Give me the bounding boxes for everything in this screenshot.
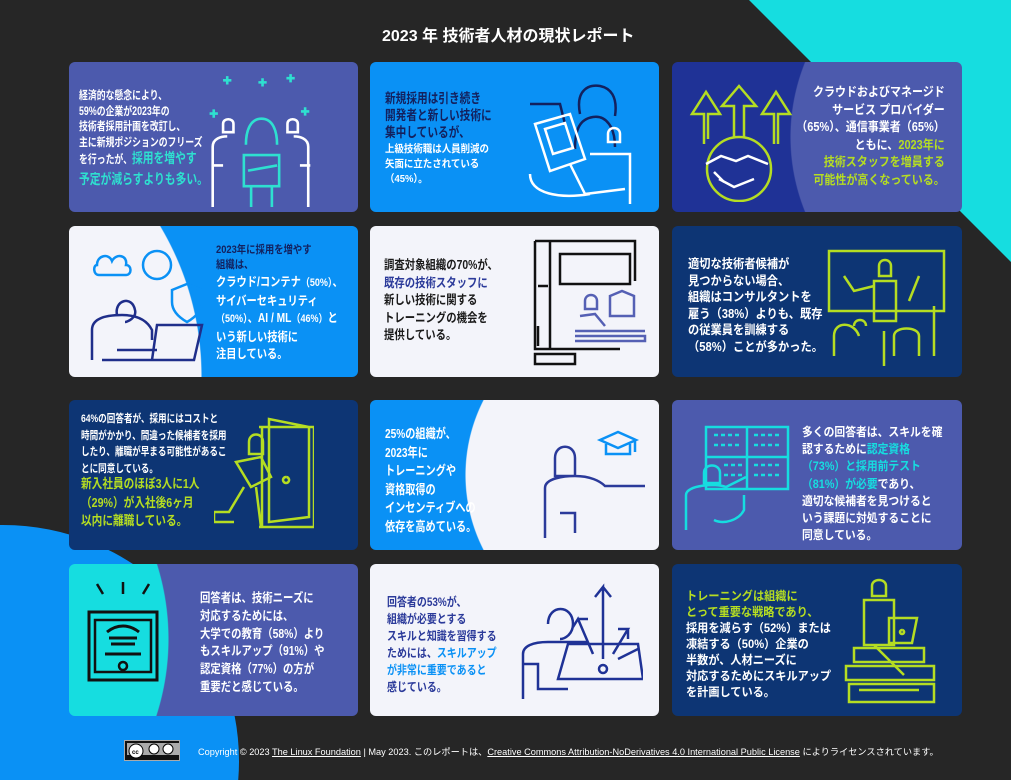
panel 7: cost of hiring and attrition xyxy=(69,400,358,550)
text: 雇う（38%）よりも、既存 xyxy=(688,306,822,320)
text: 凍結する（50%）企業の xyxy=(686,637,809,651)
icon: developers with laptop xyxy=(528,84,632,204)
text: 重要だと感じている。 xyxy=(200,680,304,694)
panel 5: training opportunities xyxy=(370,226,659,377)
panel 10: upskilling vs degree xyxy=(69,564,358,716)
text xyxy=(686,589,831,699)
panel 2: new hiring developers: 矢面に立たされている xyxy=(385,158,479,170)
text: スキルと知識を習得する xyxy=(387,629,497,643)
text: サービス プロバイダー xyxy=(832,102,945,116)
text: 新規採用は引き続き xyxy=(385,91,481,106)
text: トレーニングや xyxy=(385,463,456,478)
text: トレーニングは組織に xyxy=(686,589,798,603)
icon: people with plus signs xyxy=(210,74,310,207)
text: したり、離職が早まる可能性があるこ xyxy=(81,446,227,458)
text: 同意している。 xyxy=(802,528,877,542)
text: 採用を減らす（52%）または xyxy=(686,621,831,635)
text: 集中しているが、 xyxy=(385,125,470,140)
text: 依存を高めている。 xyxy=(385,518,476,534)
text: 2023年に xyxy=(385,444,428,460)
panel 6: consultants vs training xyxy=(672,226,962,377)
text xyxy=(385,91,492,140)
text: 時間がかかり、間違った候補者を採用 xyxy=(81,430,227,442)
text: 感じている。 xyxy=(387,680,447,694)
text: とって重要な戦略であり、 xyxy=(686,605,818,619)
icon: teacher with students xyxy=(828,250,946,366)
text: 開発者と新しい技術に xyxy=(385,108,492,123)
footer: CC license badge xyxy=(124,740,180,761)
icon: person leaving through door xyxy=(214,418,314,528)
icon: person with laptop and arrows xyxy=(522,584,643,699)
text: 可能性が高くなっている。 xyxy=(814,172,945,186)
text: 見つからない場合、 xyxy=(688,274,789,288)
panel 4: new technologies: （50%）、AI / ML（46%）と xyxy=(216,311,338,325)
icon: person on books with laptop xyxy=(844,578,936,704)
text: 適切な候補者を見つけると xyxy=(802,494,932,508)
text: 新しい技術に関する xyxy=(384,293,477,307)
text: インセンティブへの xyxy=(385,500,476,515)
footer: CC license badge: cc xyxy=(132,750,139,756)
text: の従業員を訓練する xyxy=(688,323,789,337)
panel 4: new technologies xyxy=(69,226,358,377)
text xyxy=(385,426,476,534)
text: クラウドおよびマネージド xyxy=(813,85,945,99)
panel 7: cost of hiring and attrition: （29%）が入社後6ヶ月 xyxy=(81,494,194,510)
text xyxy=(387,595,497,694)
text: 2023年に採用を増やす xyxy=(216,244,312,256)
panel 7: cost of hiring and attrition: 以内に離職している。 xyxy=(81,513,187,528)
text: 対応するためにスキルアップ xyxy=(686,669,831,683)
text: 認するために認定資格 xyxy=(802,442,910,456)
text xyxy=(79,89,208,186)
text: 技術者採用計画を改訂し、 xyxy=(79,121,185,133)
text: を計画している。 xyxy=(686,685,775,699)
text: 回答者は、技術ニーズに xyxy=(200,591,314,605)
text: 経済的な懸念により、 xyxy=(79,90,167,102)
panel 2: new hiring developers xyxy=(370,62,659,212)
footer: copyright text: Copyright © 2023 The Linux Foundation | May 2023. このレポートは、Creative Commons Attribution-NoDerivatives 4.0 International Public License によりライセンスされています。 xyxy=(198,747,939,757)
text: 技術スタッフを増員する xyxy=(824,155,945,169)
panel 12: training strategy xyxy=(672,564,962,716)
text: 対応するためには、 xyxy=(200,609,293,623)
text: が非常に重要であると xyxy=(387,663,487,677)
panel 1: hiring freeze xyxy=(69,62,358,212)
text xyxy=(81,412,227,474)
text: （81%）が必要であり、 xyxy=(802,477,920,491)
panel 2: new hiring developers: （45%）。 xyxy=(385,173,428,185)
text: 提供している。 xyxy=(384,328,456,342)
panel 2: new hiring developers: 上級技術職は人員削減の xyxy=(385,143,489,155)
text: 適切な技術者候補が xyxy=(688,257,789,271)
text: （58%）ことが多かった。 xyxy=(688,340,823,354)
text: 主に新規ポジションのフリーズ xyxy=(79,136,203,148)
text: 調査対象組織の70%が、 xyxy=(384,258,498,272)
text: とに同意している。 xyxy=(81,462,158,474)
text: 認定資格（77%）の方が xyxy=(200,662,314,676)
text: （73%）と採用前テスト xyxy=(802,459,921,473)
panel 4: new technologies: 注目している。 xyxy=(216,347,287,361)
text: 多くの回答者は、スキルを確 xyxy=(802,425,942,439)
icon: person at checklist screen xyxy=(684,426,790,530)
text xyxy=(688,257,823,354)
text: 組織は、 xyxy=(216,259,253,271)
text: 資格取得の xyxy=(385,482,436,496)
panel 4: new technologies: サイバーセキュリティ xyxy=(216,294,318,308)
text: 大学での教育（58%）より xyxy=(200,627,324,641)
text: ともに、2023年に xyxy=(855,138,945,152)
panel 7: cost of hiring and attrition: 新入社員のほぼ3人に1人 xyxy=(81,476,199,491)
icon: certificate xyxy=(88,582,158,682)
icon: handshake with arrows xyxy=(690,84,792,202)
text: 既存の技術スタッフに xyxy=(384,276,488,290)
text: 組織が必要とする xyxy=(387,612,466,626)
text: 64%の回答者が、採用にはコストと xyxy=(81,413,218,425)
text: 半数が、人材ニーズに xyxy=(686,653,797,667)
text: いう課題に対処することに xyxy=(802,511,932,525)
text: もスキルアップ（91%）や xyxy=(200,644,325,658)
text: 59%の企業が2023年の xyxy=(79,106,170,118)
text xyxy=(384,258,498,342)
text: トレーニングの機会を xyxy=(384,310,488,324)
panel 9: certifications and tests xyxy=(672,400,962,550)
icon: person reading at window xyxy=(534,240,646,366)
panel 4: new technologies: クラウド/コンテナ（50%）、 xyxy=(216,275,343,289)
panel 8: training incentives xyxy=(370,400,659,550)
title: 2023 年 技術者人材の現状レポート xyxy=(382,28,634,45)
icon: woman with graduation cap xyxy=(544,430,645,538)
text xyxy=(796,85,945,186)
text: （65%）、通信事業者（65%） xyxy=(796,120,945,134)
text xyxy=(802,425,942,542)
text xyxy=(216,244,312,271)
text: 予定が減らすよりも多い。 xyxy=(79,170,208,186)
text: ためには、スキルアップ xyxy=(387,646,497,660)
text: 組織はコンサルタントを xyxy=(688,290,812,304)
panel 11: skills acquisition xyxy=(370,564,659,716)
panel 4: new technologies: いう新しい技術に xyxy=(216,330,298,344)
text: 25%の組織が、 xyxy=(385,426,456,441)
text xyxy=(200,590,325,694)
text: 回答者の53%が、 xyxy=(387,595,466,609)
panel 3: cloud providers xyxy=(672,62,962,212)
icon: person at laptop with cloud, brain, shield xyxy=(90,250,204,362)
text: を行ったが、採用を増やす xyxy=(79,150,197,166)
